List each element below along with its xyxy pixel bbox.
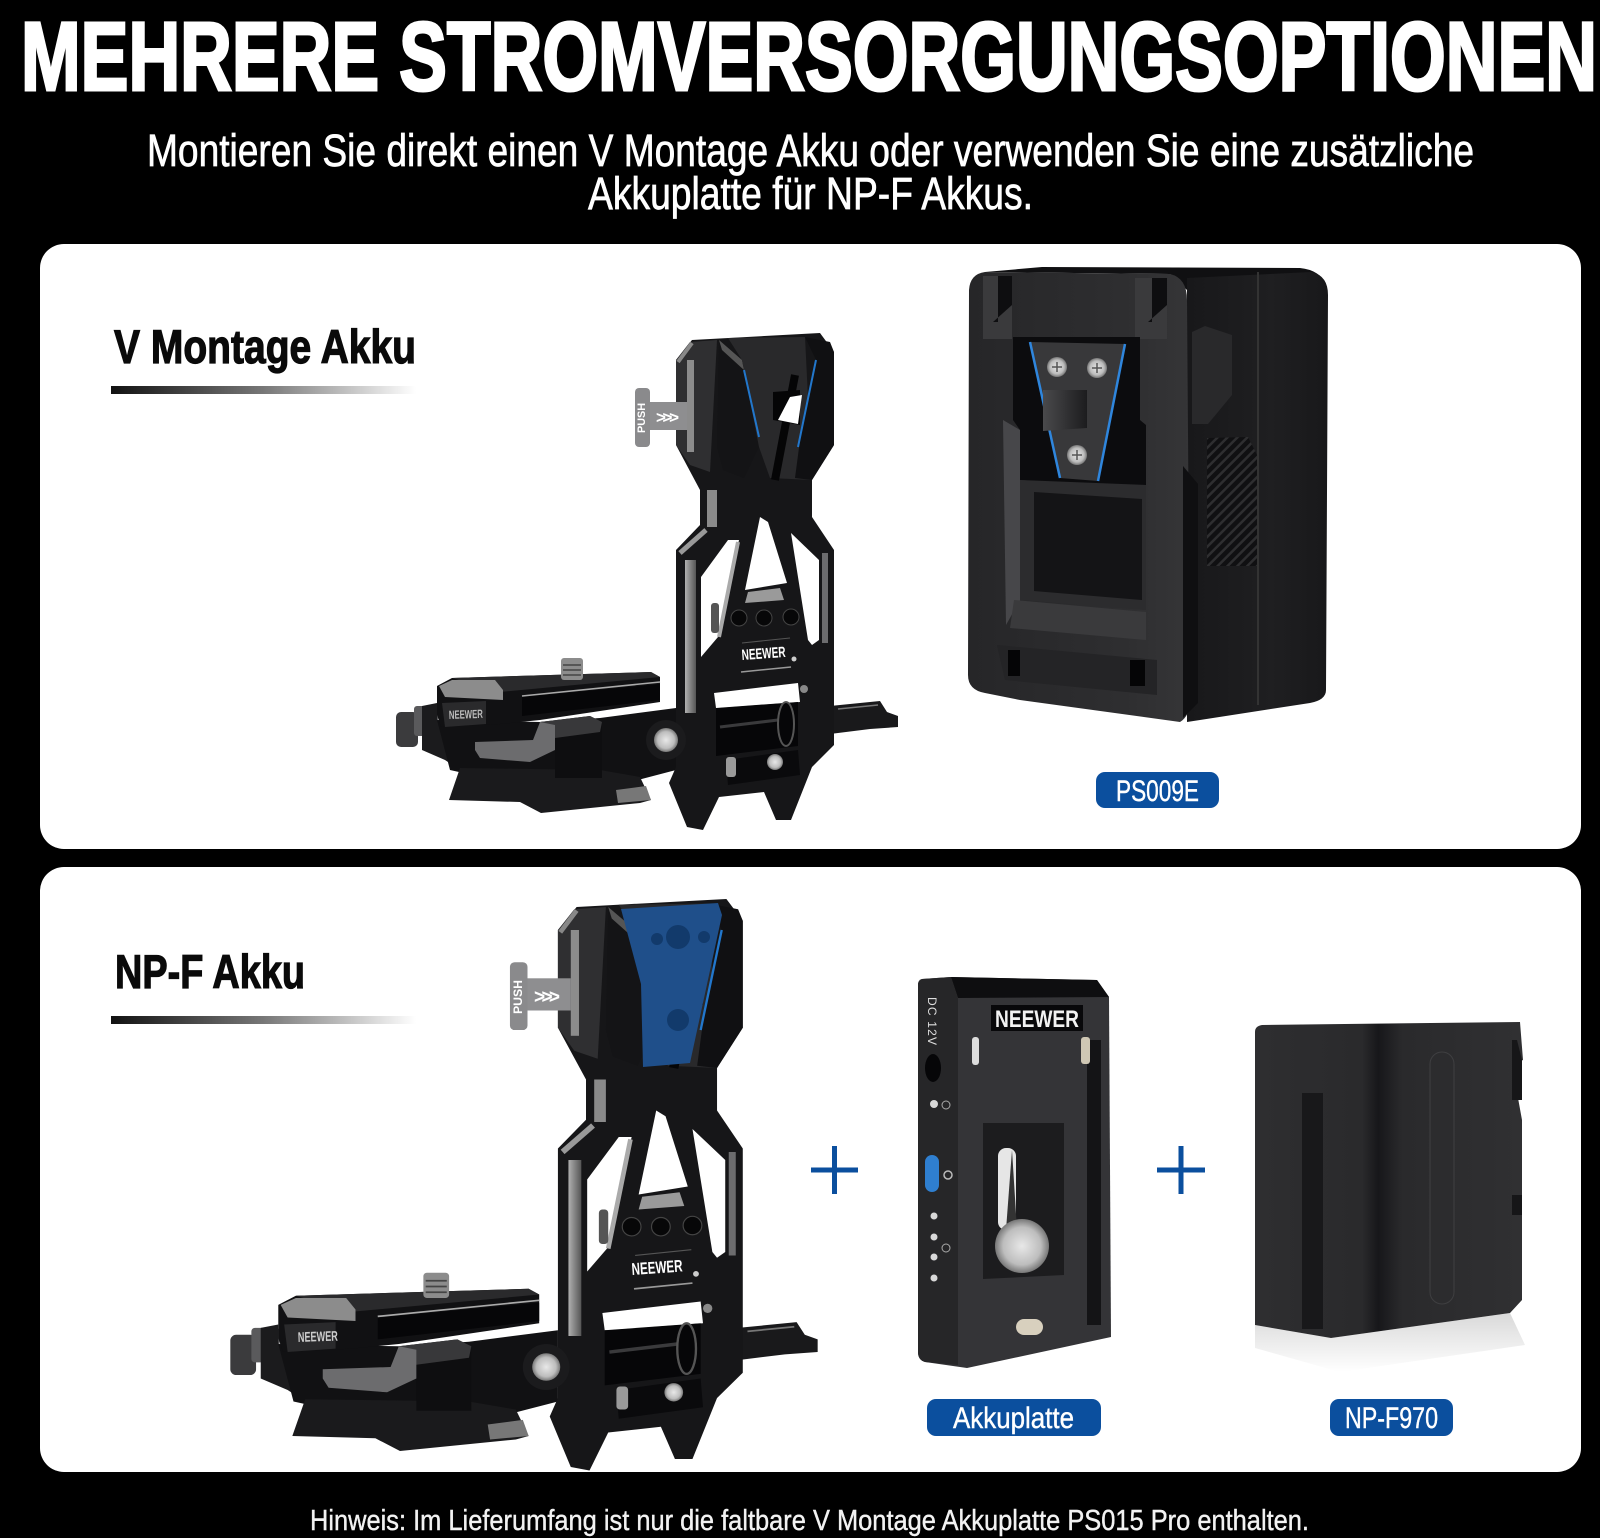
panel: V Montage Akku — [40, 244, 1581, 849]
push label: >>> — [656, 408, 679, 427]
plus icon — [1157, 1146, 1205, 1194]
push label — [511, 980, 560, 1014]
top plate — [437, 672, 660, 727]
V mount battery — [968, 267, 1328, 722]
heading underline — [111, 1016, 416, 1024]
indicator dots — [930, 1100, 938, 1282]
V plate screws — [1047, 357, 1107, 465]
bracket logo: NEEWER — [631, 1256, 683, 1279]
push tab — [650, 402, 687, 430]
subtitle: Akkuplatte für NP-F Akkus. — [588, 168, 1033, 219]
contact pins — [972, 1037, 979, 1065]
bracket logo: NEEWER — [741, 644, 786, 664]
mounting screw — [561, 658, 583, 680]
badge: Akkuplatte: Akkuplatte — [953, 1402, 1074, 1435]
push label: >>> — [534, 987, 560, 1008]
V plate — [1030, 342, 1125, 481]
plate rail — [1087, 1040, 1101, 1325]
top surface — [985, 267, 1326, 290]
battery shadow — [1255, 1313, 1525, 1372]
power button — [925, 1155, 939, 1192]
bracket bevels — [685, 560, 696, 713]
panel: NP-F Akku — [40, 867, 1581, 1472]
cylinder in lower opening — [716, 702, 798, 756]
push label: PUSH — [636, 403, 648, 433]
battery slot — [1302, 1093, 1323, 1329]
plate logo: NEEWER — [995, 1006, 1079, 1033]
rod — [830, 701, 898, 734]
base logo: NEEWER — [449, 707, 483, 722]
blue mount plate — [621, 903, 722, 1067]
push label — [636, 403, 679, 433]
side groove — [1430, 1052, 1454, 1304]
pivot bolt — [646, 720, 686, 760]
badge: PS009E: PS009E — [1116, 775, 1199, 808]
DC jack — [925, 1054, 941, 1082]
recess — [1013, 337, 1146, 485]
side rail — [1183, 466, 1198, 718]
port cover — [1192, 326, 1232, 424]
blue edge lines — [744, 370, 759, 437]
tripod slot — [998, 1148, 1016, 1230]
right notches — [1512, 1040, 1522, 1100]
footnote: Hinweis: Im Lieferumfang ist nur die faltbare V Montage Akkuplatte PS015 Pro enthalten. — [310, 1505, 1309, 1537]
battery plate — [918, 977, 1111, 1368]
latch slot — [773, 390, 800, 425]
foldable V mount bracket — [396, 333, 898, 830]
badge: NP-F970: NP-F970 — [1345, 1402, 1438, 1435]
head — [676, 340, 717, 472]
seam — [1257, 272, 1259, 705]
heading: V Montage Akku: V Montage Akku — [114, 320, 416, 373]
base logo: NEEWER — [298, 1328, 338, 1345]
contact panel — [1034, 492, 1142, 600]
DC 12V label: DC 12V — [925, 997, 939, 1045]
plate screw — [995, 1219, 1049, 1273]
plus icon — [811, 1146, 858, 1194]
foldable V mount bracket with blue plate — [230, 899, 818, 1470]
knob — [396, 712, 418, 747]
push label: PUSH — [511, 980, 525, 1014]
cross bolt — [767, 754, 783, 770]
heading underline — [111, 386, 416, 394]
upright plate — [669, 333, 834, 830]
NP-F battery — [1255, 1022, 1525, 1372]
heading: NP-F Akku: NP-F Akku — [115, 945, 305, 998]
lever — [540, 716, 602, 778]
threaded holes — [731, 610, 747, 626]
top clips — [983, 276, 1012, 339]
lower ledge — [1010, 600, 1146, 640]
locating pin — [1016, 1319, 1043, 1335]
vent — [1207, 437, 1257, 566]
base clamp — [422, 703, 460, 770]
subtitle — [147, 125, 1474, 219]
